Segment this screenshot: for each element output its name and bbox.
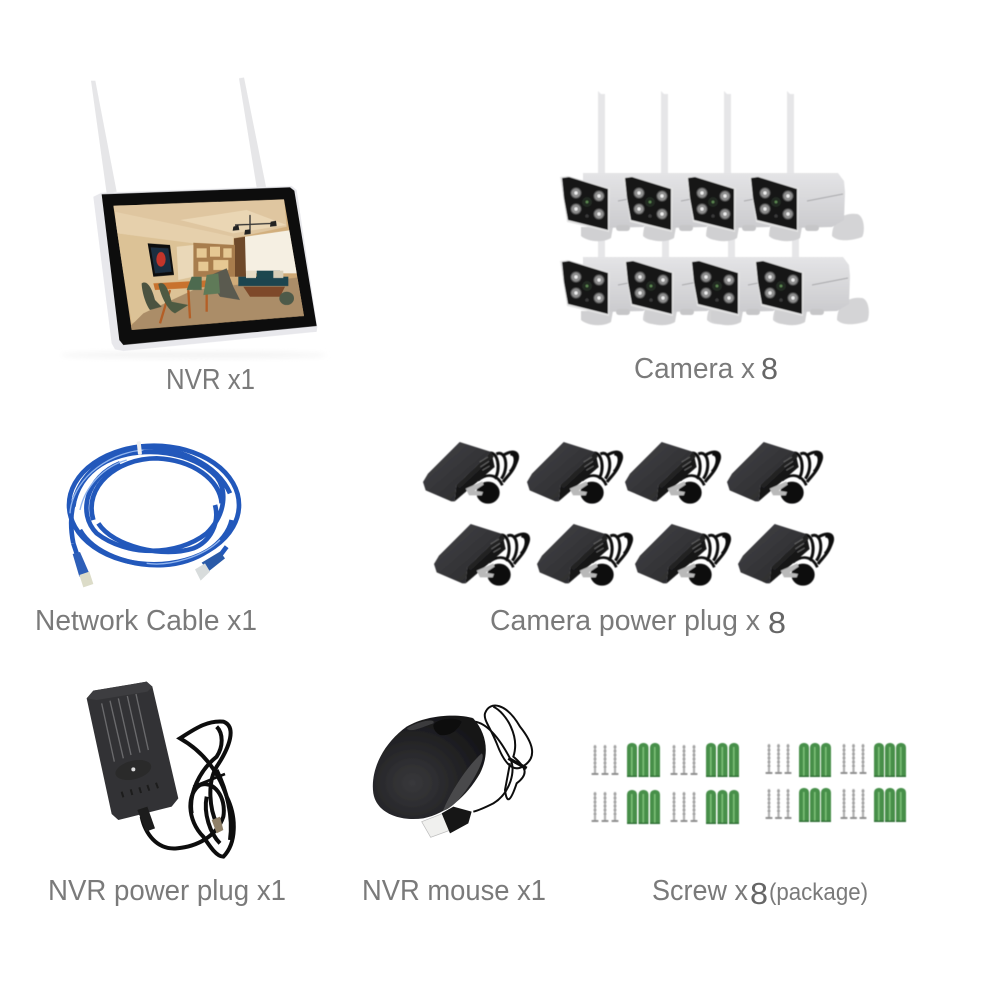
- panel: network cable: [35, 441, 257, 637]
- panel: screws: [591, 743, 906, 911]
- label: package: (package): [769, 879, 868, 906]
- panel: NVR power plug: [48, 682, 286, 907]
- label: NVR x1: NVR x1: [166, 364, 255, 396]
- icon: top row of four cameras: [560, 91, 864, 241]
- panel: NVR: [91, 78, 318, 389]
- label: Camera power plug x: Camera power plug x: [490, 605, 760, 637]
- label: Camera x8: Camera x: [634, 353, 755, 385]
- label: digit 8: 8: [761, 351, 778, 386]
- label: NVR power plug x1: NVR power plug x1: [48, 875, 286, 907]
- icon: black USB mouse with cord: [373, 706, 532, 837]
- label: Network Cable x1: Network Cable x1: [35, 605, 257, 637]
- label: NVR mouse x1: NVR mouse x1: [362, 875, 546, 907]
- label: digit 8: 8: [750, 876, 768, 911]
- panel: camera power plugs: [423, 442, 833, 640]
- icon: NVR monitor with antennas: [91, 78, 318, 357]
- panel: NVR mouse: [362, 706, 546, 907]
- panel: cameras: [560, 91, 869, 386]
- label: Screw x: Screw x: [652, 875, 748, 907]
- icon: blue coiled network cable: [69, 441, 239, 587]
- icon: NVR power adapter with cord: [87, 682, 234, 857]
- icon: eight black power adapters: [423, 442, 833, 584]
- icon: screws and green wall anchors: [591, 743, 906, 824]
- label: digit 8: 8: [768, 605, 786, 640]
- icon: bottom row of four cameras: [560, 175, 869, 325]
